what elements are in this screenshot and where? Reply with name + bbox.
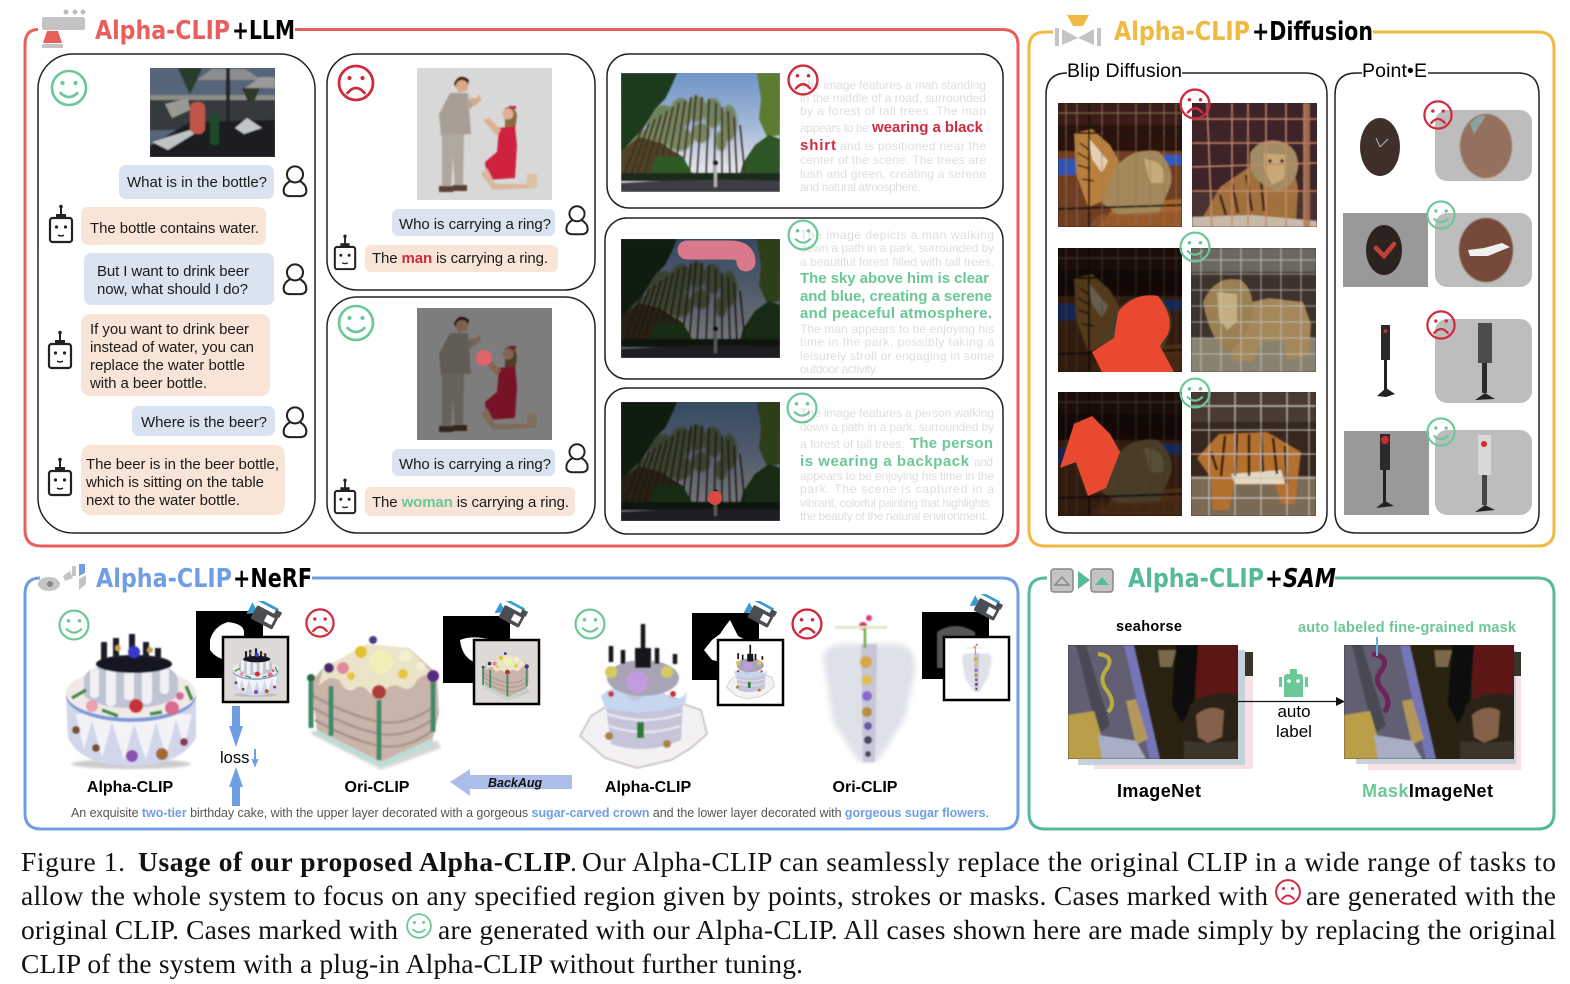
caption text: time in the park, possibly taking a [800, 335, 994, 349]
figure caption [21, 846, 1556, 979]
icon: frown [1427, 311, 1455, 339]
icon: frown [1181, 90, 1209, 118]
heading: Alpha-CLIP+LLM: Alpha-CLIP [95, 16, 230, 46]
image: masked woman with ring [417, 308, 552, 440]
render: traffic light original [1435, 319, 1532, 403]
render: traffic light Alpha-CLIP [1435, 430, 1532, 515]
image: caged liger [1192, 103, 1317, 227]
icon: frown [306, 609, 334, 637]
answer bubble [81, 314, 270, 396]
image: forest [621, 73, 780, 192]
figure caption: original CLIP. Cases marked with [21, 914, 398, 945]
answer bubble: next to the water bottle. [86, 492, 240, 509]
icon: smile [60, 611, 88, 639]
heading: Alpha-CLIP+LLM: +LLM [232, 16, 295, 46]
icon: robot [49, 458, 71, 495]
caption text: down a path in a park, surrounded by [800, 241, 994, 255]
figure caption: allow the whole system to focus on any specified region given by points, strokes or masks. Cases marked with [21, 880, 1268, 911]
answer bubble: The beer is in the beer bottle, [86, 456, 279, 473]
icon: camera [969, 590, 1004, 621]
caption text: lush and green, creating a serene [800, 167, 986, 181]
label: MaskImageNet: MaskImageNet [1362, 781, 1493, 801]
sub-heading: Blip Diffusion [1067, 60, 1182, 82]
caption text: The image features a man standing [800, 78, 986, 92]
heading: Alpha-CLIP+Diffusion [1114, 17, 1373, 47]
image stack: ImageNet [1068, 645, 1253, 769]
icon: frown [339, 66, 373, 100]
icon: camera [245, 597, 283, 630]
caption text: in the middle of a road, surrounded [800, 91, 986, 105]
panel: forest caption Alpha-CLIP stroke [605, 218, 1003, 379]
label: Alpha-CLIP [87, 779, 173, 796]
render: clock from original CLIP [1435, 110, 1532, 181]
figure caption: Usage of our proposed Alpha-CLIP [138, 846, 571, 877]
caption text: center of the scene. The trees are [800, 153, 986, 167]
object: clock [1360, 118, 1400, 176]
prompt sentence: An exquisite two-tier birthday cake, with the upper layer decorated with a gorgeous sugar-carved crown and the lower layer decorated with gorgeous sugar flowers. [71, 806, 989, 820]
question bubble: now, what should I do? [97, 281, 248, 298]
answer bubble: The bottle contains water. [90, 220, 259, 237]
icon: robot [335, 235, 355, 269]
image: masked lion [1058, 248, 1182, 372]
caption text: vibrant, colorful painting that highlights [800, 496, 990, 510]
question bubble: What is in the bottle? [127, 174, 267, 191]
figure caption: are generated with our Alpha-CLIP. All cases shown here are made simply by replacing the original [438, 914, 1556, 945]
icon: LLM scene [42, 10, 86, 48]
view: mask and render [443, 616, 539, 704]
answer bubble [365, 245, 558, 272]
panel: Alpha-CLIP ring question [327, 297, 595, 533]
caption text: and blue, creating a serene [800, 288, 992, 305]
render: clock from Alpha-CLIP [1435, 213, 1532, 287]
icon: smile [52, 71, 86, 105]
icon: smile [1427, 418, 1455, 446]
icon: camera [743, 597, 778, 628]
figure caption: are generated with the [1306, 880, 1556, 911]
answer bubble [81, 207, 266, 245]
render: cake [66, 634, 196, 769]
caption text: and natural atmosphere. [800, 180, 921, 194]
answer bubble: The woman is carrying a ring. [372, 494, 569, 511]
caption text: outdoor activity. [800, 362, 878, 376]
caption text: the beauty of the natural environment. [800, 509, 988, 523]
icon: smile [1427, 201, 1455, 229]
image stack: MaskImageNet [1344, 637, 1521, 770]
heading: Alpha-CLIP+SAM: Alpha-CLIP [1128, 564, 1264, 594]
caption text: down a path in a park, surrounded by [800, 420, 994, 434]
heading: Alpha-CLIP+Diffusion: Alpha-CLIP [1114, 17, 1250, 47]
heading: Alpha-CLIP+SAM: +SAM [1265, 564, 1336, 594]
caption text: a beautiful forest filled with tall trees. [800, 255, 994, 269]
view: mask and render [692, 613, 783, 705]
label: Alpha-CLIP [605, 779, 691, 796]
icon: smile [576, 610, 604, 638]
figure caption: Figure 1. [21, 846, 125, 877]
render: cake [307, 636, 441, 770]
caption text: The man appears to be enjoying his [800, 322, 994, 336]
render: cake [823, 615, 915, 762]
object: traffic light [1377, 325, 1395, 397]
question bubble [392, 209, 555, 236]
label: Ori-CLIP [833, 779, 898, 796]
question bubble [132, 406, 275, 436]
caption text: a forest of tall trees. [800, 437, 905, 451]
caption text: shirt [800, 137, 836, 154]
question bubble [84, 253, 274, 305]
icon: NeRF eye [38, 564, 86, 591]
answer bubble [365, 487, 575, 516]
answer bubble: which is sitting on the table [85, 474, 264, 491]
view: mask and render [196, 611, 288, 702]
question bubble: Who is carrying a ring? [399, 456, 551, 473]
heading: Alpha-CLIP+NeRF: Alpha-CLIP [96, 564, 232, 594]
panel: forest caption original CLIP [607, 54, 1003, 208]
label: auto label: label [1276, 722, 1312, 741]
icon: smile [1181, 379, 1209, 407]
sub-heading: Point•E [1362, 60, 1427, 82]
panel: Point-E [1335, 60, 1539, 533]
heading: Alpha-CLIP+NeRF: +NeRF [233, 564, 312, 594]
caption text: The person [910, 435, 993, 452]
answer bubble: If you want to drink beer [90, 321, 249, 338]
caption text: The sky above him is clear [800, 270, 989, 287]
icon: inline smile [407, 914, 431, 938]
icon: SAM images [1051, 569, 1113, 592]
group: Ori-CLIP tall cake [793, 590, 1009, 796]
caption text: wearing a black [871, 119, 984, 136]
arrow: auto label [1238, 697, 1345, 706]
image: beach table with masked bottle [150, 68, 275, 157]
icon: user [284, 166, 306, 196]
icon: green robot [1279, 669, 1308, 697]
icon: robot [50, 205, 72, 242]
caption text: The image features a person walking [800, 406, 994, 420]
group: Alpha-CLIP two-tier cake [60, 597, 288, 796]
image: lion in cage [1191, 248, 1316, 372]
panel: Blip Diffusion [1046, 60, 1327, 533]
label: fine-grained mask: auto labeled fine-grained mask [1298, 620, 1517, 636]
group: Ori-CLIP cake [306, 597, 539, 796]
caption text: appears to be enjoying his time in the [800, 469, 994, 483]
icon: diffusion [1055, 15, 1101, 46]
object: masked clock [1343, 213, 1428, 287]
panel: Alpha-CLIP + LLM [25, 10, 1018, 546]
arrow: BackAug: BackAug [488, 776, 543, 790]
label: ImageNet: ImageNet [1117, 781, 1201, 801]
icon: smile [788, 394, 816, 422]
caption text: The image depicts a man walking [800, 228, 994, 242]
group: Alpha-CLIP crown cake [576, 597, 783, 796]
panel: original CLIP ring question [327, 54, 595, 290]
arrow: loss down [229, 706, 243, 747]
icon: frown [1424, 101, 1452, 129]
image: man and woman with ring [417, 68, 552, 200]
caption text: park. The scene is captured in a [800, 482, 994, 496]
caption text: and [974, 455, 993, 469]
question bubble [119, 165, 274, 199]
figure caption: Our Alpha-CLIP can seamlessly replace the original CLIP in a wide range of tasks to [582, 846, 1556, 877]
render: cake [580, 624, 707, 768]
icon: robot [49, 331, 71, 368]
answer bubble [81, 445, 285, 515]
answer bubble: replace the water bottle [90, 357, 245, 374]
label: loss: loss [220, 749, 249, 767]
panel: Alpha-CLIP + SAM [1029, 564, 1554, 829]
label: seahorse: seahorse [1116, 619, 1182, 635]
icon: user [566, 444, 588, 472]
icon: smile [789, 221, 817, 249]
answer bubble: instead of water, you can [90, 339, 254, 356]
image: tiger in cage [1191, 392, 1316, 516]
image: forest with point [621, 402, 780, 521]
arrow: BackAug [450, 769, 572, 796]
icon: user [284, 407, 306, 437]
icon: camera [494, 597, 529, 628]
question bubble: But I want to drink beer [97, 263, 249, 280]
answer bubble: with a beer bottle. [89, 375, 207, 392]
figure caption: CLIP of the system with a plug-in Alpha-CLIP without further tuning. [21, 948, 803, 979]
image: lion and tiger [1058, 103, 1182, 227]
object: masked traffic light [1344, 431, 1429, 515]
caption text [800, 406, 994, 523]
icon: smile [1181, 233, 1209, 261]
icon: frown [789, 66, 817, 94]
caption text: appears to be [800, 121, 869, 135]
view: mask and render [922, 612, 1009, 700]
caption text: leisurely stroll or engaging in some [800, 349, 994, 363]
caption text [800, 228, 994, 376]
icon: smile [339, 306, 373, 340]
icon: robot [335, 479, 355, 513]
image: forest with sky stroke [621, 239, 780, 358]
caption text: by a forest of tall trees. The man [800, 104, 986, 118]
label: auto label [1276, 702, 1312, 741]
caption text [800, 78, 986, 194]
panel: chat about bottle [38, 54, 315, 533]
question bubble: Where is the beer? [141, 414, 267, 431]
heading: Alpha-CLIP+Diffusion: +Diffusion [1252, 17, 1373, 47]
icon: user [566, 206, 588, 234]
panel: Alpha-CLIP + NeRF [25, 564, 1018, 829]
icon: inline frown [1276, 880, 1300, 904]
panel: Alpha-CLIP + Diffusion [1029, 15, 1554, 546]
caption text: is wearing a backpack [800, 453, 970, 470]
arrow: loss up [229, 767, 243, 806]
panel: forest caption Alpha-CLIP point [605, 388, 1003, 534]
caption text: and peaceful atmosphere. [800, 305, 992, 322]
answer bubble: The man is carrying a ring. [372, 250, 548, 267]
question bubble: Who is carrying a ring? [399, 216, 551, 233]
icon: frown [793, 610, 821, 638]
label: auto label: auto [1277, 702, 1311, 721]
caption text: and is positioned near the [840, 139, 986, 153]
question bubble [392, 449, 555, 476]
figure caption: . [570, 846, 577, 877]
icon: user [284, 264, 306, 294]
label: Ori-CLIP [345, 779, 410, 796]
image: masked tiger [1058, 392, 1182, 516]
